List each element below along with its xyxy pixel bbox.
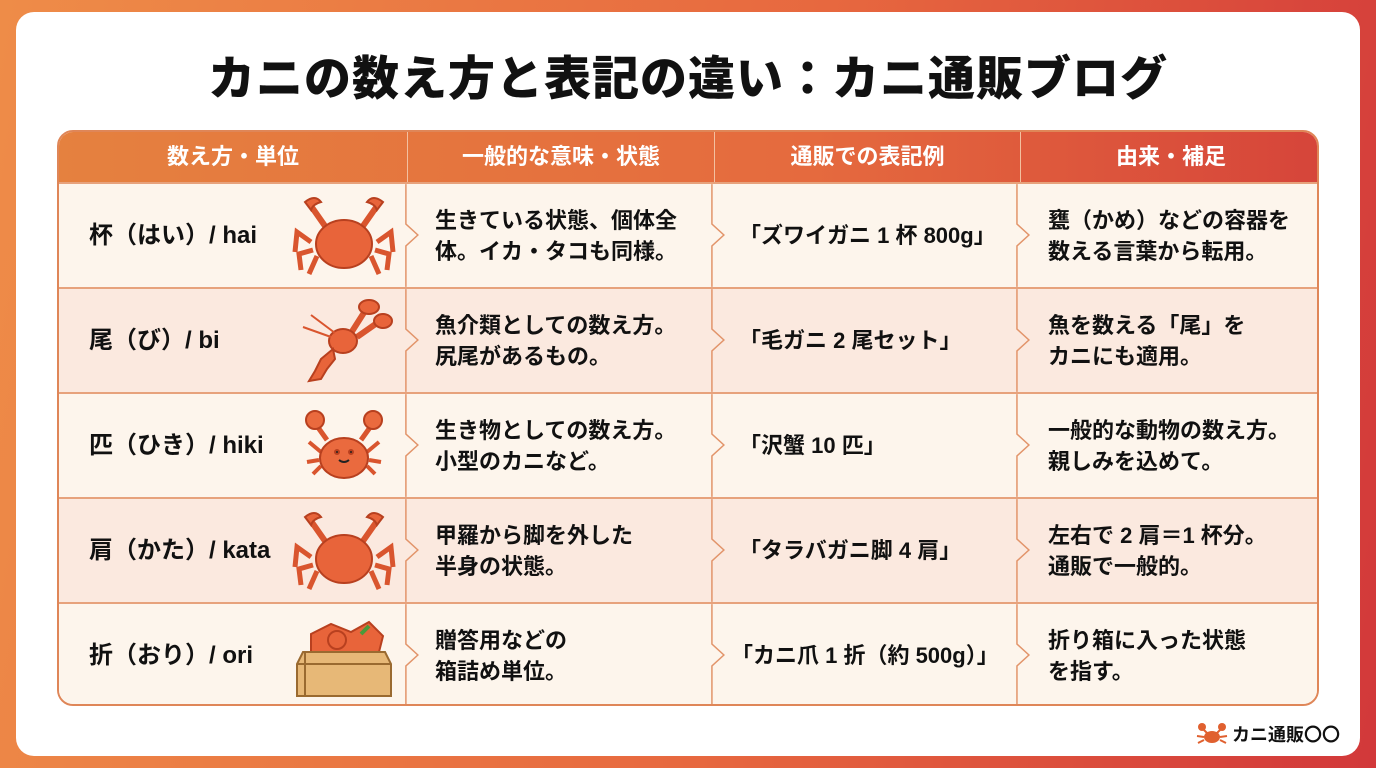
row: kata: [59, 497, 1317, 602]
row: hiki: 小型のカニなど。: [435, 448, 610, 474]
footer logo: [1196, 723, 1340, 745]
row: kata: 肩（かた）/ kata: [89, 537, 270, 564]
row: hiki: [59, 392, 1317, 497]
row: hai: 「ズワイガニ 1 杯 800g」: [739, 223, 996, 248]
row: bi: 魚を数える「尾」を: [1048, 312, 1245, 338]
row: hiki: 「沢蟹 10 匹」: [739, 433, 886, 458]
title: カニの数え方と表記の違い：カニ通販ブログ: [208, 52, 1168, 105]
row: bi: 魚介類としての数え方。: [435, 312, 676, 338]
icon: crab: [292, 197, 396, 275]
row: hiki: 一般的な動物の数え方。: [1048, 418, 1290, 442]
table: [57, 130, 1319, 706]
row: ori: 贈答用などの: [435, 628, 567, 652]
table header: 通販での表記例: [790, 144, 944, 169]
row: ori: を指す。: [1048, 658, 1134, 684]
row: bi: 「毛ガニ 2 尾セット」: [739, 328, 961, 353]
row: hai: 体。イカ・タコも同様。: [435, 238, 677, 264]
row: hai: [59, 182, 1317, 287]
row: hai: 生きている状態、個体全: [435, 208, 677, 232]
table header: [59, 132, 1317, 182]
row: ori: 折り箱に入った状態: [1048, 628, 1246, 652]
row: hai: 杯（はい）/ hai: [89, 222, 257, 249]
row: kata: 通販で一般的。: [1048, 554, 1202, 578]
icon: small crab: [305, 410, 383, 479]
row: ori: 「カニ爪 1 折（約 500g）」: [731, 643, 999, 668]
row: ori: [59, 602, 1317, 708]
row: bi: 尾（び）/ bi: [89, 327, 220, 354]
row: hiki: 匹（ひき）/ hiki: [89, 432, 264, 459]
row: hiki: 生き物としての数え方。: [435, 418, 676, 442]
icon: gift box: [296, 620, 392, 697]
icon: crab: [292, 512, 396, 590]
table header: 一般的な意味・状態: [462, 144, 660, 169]
footer logo: カニ通販〇〇: [1232, 725, 1340, 745]
row: ori: 箱詰め単位。: [435, 658, 567, 684]
row: kata: 半身の状態。: [435, 554, 567, 578]
row: kata: 甲羅から脚を外した: [435, 522, 633, 548]
row: ori: 折（おり）/ ori: [89, 642, 253, 669]
icon: logo crab: [1196, 723, 1228, 744]
row: bi: 尻尾があるもの。: [435, 344, 611, 368]
row: hai: 数える言葉から転用。: [1048, 238, 1267, 264]
table header: 由来・補足: [1116, 144, 1226, 169]
table header: 数え方・単位: [167, 144, 299, 169]
row: bi: カニにも適用。: [1048, 344, 1202, 368]
row: kata: 「タラバガニ脚 4 肩」: [739, 538, 961, 563]
row: bi: [59, 287, 1317, 392]
row: kata: 左右で 2 肩＝1 杯分。: [1048, 522, 1267, 548]
row: hai: 甕（かめ）などの容器を: [1048, 208, 1290, 232]
icon: lobster: [302, 299, 393, 382]
row: hiki: 親しみを込めて。: [1048, 448, 1223, 474]
